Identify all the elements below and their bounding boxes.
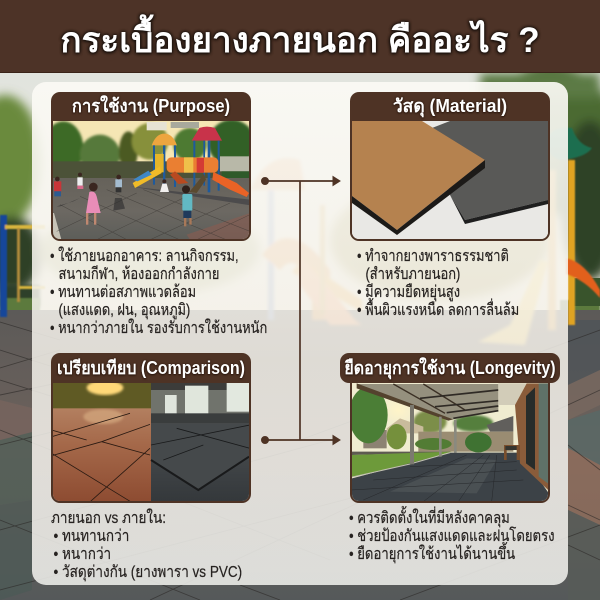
panel: longevity (340, 353, 560, 564)
material heading (350, 92, 550, 121)
material bullets (357, 248, 519, 319)
purpose bullets: • ใช้ภายนอกอาคาร: ลานกิจกรรม, (50, 248, 239, 265)
material bullets: • พื้นผิวแรงหนืด ลดการลื่นล้ม (357, 302, 519, 319)
comparison text: • ทนทานกว่า (54, 528, 129, 545)
purpose bullets: (แสงแดด, ฝน, อุณหภูมิ) (58, 302, 190, 319)
longevity heading: ยืดอายุการใช้งาน (Longevity) (344, 358, 556, 378)
title banner: กระเบื้องยางภายนอก คืออะไร ? (60, 21, 540, 60)
title banner (0, 0, 600, 73)
panel: purpose (50, 92, 267, 337)
material bullets: • ทำจากยางพาราธรรมชาติ (357, 248, 509, 265)
longevity photo: covered patio (350, 383, 550, 503)
purpose bullets (50, 246, 267, 337)
comparison text: • หนากว่า (54, 546, 111, 563)
comparison heading: เปรียบเทียบ (Comparison) (57, 358, 245, 378)
longevity bullets: • ช่วยป้องกันแสงแดดและฝนโดยตรง (349, 528, 555, 545)
comparison text: ภายนอก vs ภายใน: (51, 510, 166, 527)
material photo: rubber tile samples (350, 121, 550, 241)
tile colour patches (0, 320, 600, 600)
longevity bullets (349, 506, 555, 564)
purpose heading (51, 92, 251, 121)
panel: material (350, 92, 550, 319)
comparison text: • วัสดุต่างกัน (ยางพารา vs PVC) (54, 564, 242, 581)
connector lines and arrows (261, 176, 341, 446)
material bullets: (สำหรับภายนอก) (365, 266, 460, 283)
purpose bullets: สนามกีฬา, ห้องออกกำลังกาย (58, 266, 219, 283)
purpose heading: การใช้งาน (Purpose) (72, 96, 230, 116)
panel: comparison (51, 353, 251, 582)
tile joints (0, 322, 600, 600)
material heading: วัสดุ (Material) (393, 96, 507, 116)
material bullets: • มีความยืดหยุ่นสูง (357, 284, 460, 301)
purpose photo: children on playground (51, 121, 251, 241)
children (86, 192, 101, 213)
purpose bullets: • ทนทานต่อสภาพแวดล้อม (50, 284, 196, 301)
playground structures (0, 128, 600, 325)
longevity heading (340, 353, 560, 383)
translucent white content panel (32, 82, 568, 585)
comparison text (51, 508, 242, 582)
comparison photo: outdoor vs indoor floor (51, 383, 251, 503)
longevity bullets: • ยืดอายุการใช้งานได้นานขึ้น (349, 546, 515, 563)
longevity bullets: • ควรติดตั้งในที่มีหลังคาคลุม (349, 510, 510, 527)
comparison heading (51, 353, 251, 383)
purpose bullets: • หนากว่าภายใน รองรับการใช้งานหนัก (50, 320, 267, 337)
